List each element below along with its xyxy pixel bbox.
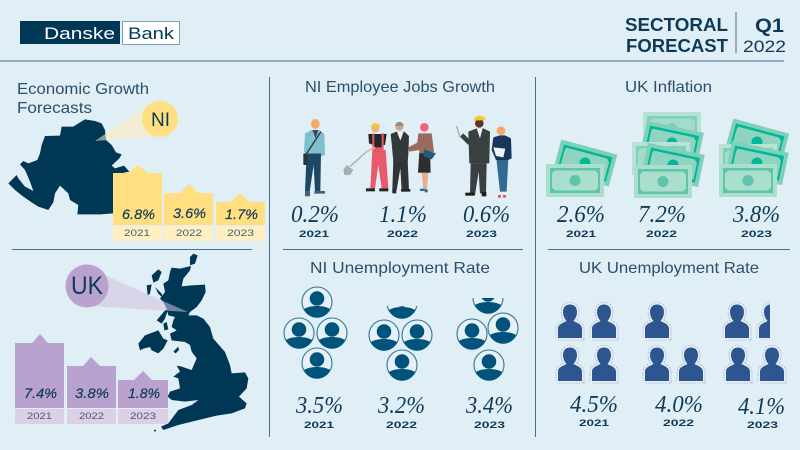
stat: 2022 7.2%: 2022 bbox=[646, 229, 677, 240]
panel: UK Unemployment Rate bbox=[558, 260, 785, 431]
stat: 2021 2.6% bbox=[557, 202, 605, 240]
stat: 2021 0.2%: 0.2% bbox=[291, 202, 339, 228]
bar chart: UK growth: 1.8% bbox=[128, 385, 160, 401]
stat: 2022 1.1%: 1.1% bbox=[379, 202, 427, 228]
heading: NI Unemployment Rate: NI Unemployment Rate bbox=[310, 260, 490, 277]
bar chart: NI growth: 2023 bbox=[227, 228, 254, 239]
heading: Economic Growth Forecasts bbox=[17, 81, 149, 117]
bar chart: UK growth bbox=[15, 334, 168, 424]
icon: people illustrations bbox=[303, 116, 512, 198]
stat: 2023 0.6%: 0.6% bbox=[463, 202, 510, 228]
stat: 2021 3.5%: 2021 bbox=[304, 420, 335, 431]
header title: Sectoral Forecast Q1 2022: Q1 bbox=[755, 16, 784, 37]
stat: 2023 3.4%: 2023 bbox=[474, 420, 505, 431]
icon: banknotes 2022 bbox=[632, 112, 705, 198]
stat: 2023 0.6% bbox=[463, 202, 510, 240]
icon: people 2023 bbox=[725, 304, 784, 381]
stat: 2023 4.1%: 2023 bbox=[747, 420, 778, 431]
callout: UK: UK bbox=[71, 272, 103, 300]
header title: Sectoral Forecast Q1 2022: 2022 bbox=[743, 37, 786, 56]
stat: 2023 3.8%: 2023 bbox=[741, 229, 772, 240]
stat: 2021 0.2% bbox=[291, 202, 339, 240]
stat: 2022 4.0%: 2022 bbox=[663, 418, 694, 429]
callout: NI: NI bbox=[151, 110, 170, 131]
bar chart: NI growth bbox=[113, 165, 265, 241]
heading: UK Unemployment Rate: UK Unemployment Rate bbox=[579, 260, 759, 277]
stat: 2022 1.1%: 2022 bbox=[387, 229, 418, 240]
heading: NI Employee Jobs Growth: NI Employee Jobs Growth bbox=[305, 79, 495, 96]
heading: UK Inflation: UK Inflation bbox=[625, 79, 712, 96]
heading: Economic Growth Forecasts: Economic Growth bbox=[17, 81, 149, 98]
stat: 2021 4.5% bbox=[570, 392, 618, 429]
stat: 2022 4.0% bbox=[655, 392, 703, 429]
panel: UK economic growth bbox=[15, 254, 248, 432]
bar chart: UK growth: 2021 bbox=[27, 411, 52, 422]
bar chart: UK growth: 2023 bbox=[130, 411, 156, 422]
stat: 2021 3.5%: 3.5% bbox=[295, 393, 343, 419]
icon: people 2021 bbox=[558, 304, 616, 381]
panel: NI economic growth bbox=[8, 81, 265, 241]
stat: 2021 3.5% bbox=[295, 393, 343, 431]
logo: Danske Bank: Bank bbox=[128, 24, 175, 43]
bar chart: UK growth: 3.8% bbox=[75, 385, 109, 401]
map: Northern Ireland bbox=[8, 119, 129, 214]
callout: UK bbox=[66, 264, 188, 312]
icon: people 2022 bbox=[645, 304, 703, 381]
stat: 2021 2.6%: 2.6% bbox=[557, 202, 605, 228]
header title: Sectoral Forecast Q1 2022 bbox=[625, 12, 786, 56]
stat: 2022 3.2% bbox=[377, 393, 425, 431]
stat: 2022 4.0%: 4.0% bbox=[655, 392, 703, 418]
stat: 2023 3.8% bbox=[732, 202, 780, 240]
stat: 2022 3.2%: 3.2% bbox=[377, 393, 425, 419]
bar chart: NI growth: 3.6% bbox=[173, 205, 206, 221]
stat: 2021 4.5%: 2021 bbox=[579, 418, 610, 429]
icon: people circles 2023 bbox=[456, 298, 519, 381]
heading: Economic Growth Forecasts: Forecasts bbox=[17, 100, 92, 117]
logo: Danske Bank bbox=[20, 21, 180, 44]
stat: 2021 4.5%: 4.5% bbox=[570, 392, 618, 418]
stat: 2023 3.4%: 3.4% bbox=[465, 393, 513, 419]
stat: 2021 2.6%: 2021 bbox=[566, 229, 597, 240]
bar chart: NI growth: 1.7% bbox=[225, 206, 258, 222]
panel: NI Unemployment Rate bbox=[284, 260, 518, 431]
callout: NI bbox=[95, 101, 178, 141]
stat: 2021 0.2%: 2021 bbox=[299, 229, 330, 240]
icon: banknotes 2021 bbox=[546, 140, 617, 197]
icon: people circles 2021 bbox=[284, 287, 347, 379]
bar chart: NI growth: 6.8% bbox=[122, 206, 155, 222]
header title: Sectoral Forecast Q1 2022: FORECAST bbox=[626, 36, 728, 56]
bar chart: NI growth: 2022 bbox=[176, 228, 202, 239]
header title: Sectoral Forecast Q1 2022: SECTORAL bbox=[625, 15, 728, 35]
stat: 2023 3.4% bbox=[465, 393, 513, 431]
logo: Danske Bank: Danske bbox=[44, 24, 115, 43]
stat: 2023 3.8%: 3.8% bbox=[732, 202, 780, 228]
stat: 2023 0.6%: 2023 bbox=[466, 229, 497, 240]
map: United Kingdom bbox=[138, 254, 248, 432]
icon: banknotes 2023 bbox=[719, 119, 789, 197]
panel: NI Employee Jobs Growth bbox=[291, 79, 512, 240]
panel: UK Inflation bbox=[546, 79, 789, 240]
stat: 2022 1.1% bbox=[379, 202, 427, 240]
icon: people circles 2022 bbox=[368, 306, 433, 381]
bar chart: NI growth: 2021 bbox=[124, 228, 150, 239]
stat: 2023 4.1%: 4.1% bbox=[738, 394, 785, 420]
bar chart: UK growth: 2022 bbox=[79, 411, 104, 422]
stat: 2022 7.2% bbox=[638, 202, 686, 240]
stat: 2022 7.2%: 7.2% bbox=[638, 202, 686, 228]
bar chart: UK growth: 7.4% bbox=[24, 385, 57, 401]
stat: 2023 4.1% bbox=[738, 394, 785, 431]
stat: 2022 3.2%: 2022 bbox=[386, 420, 417, 431]
